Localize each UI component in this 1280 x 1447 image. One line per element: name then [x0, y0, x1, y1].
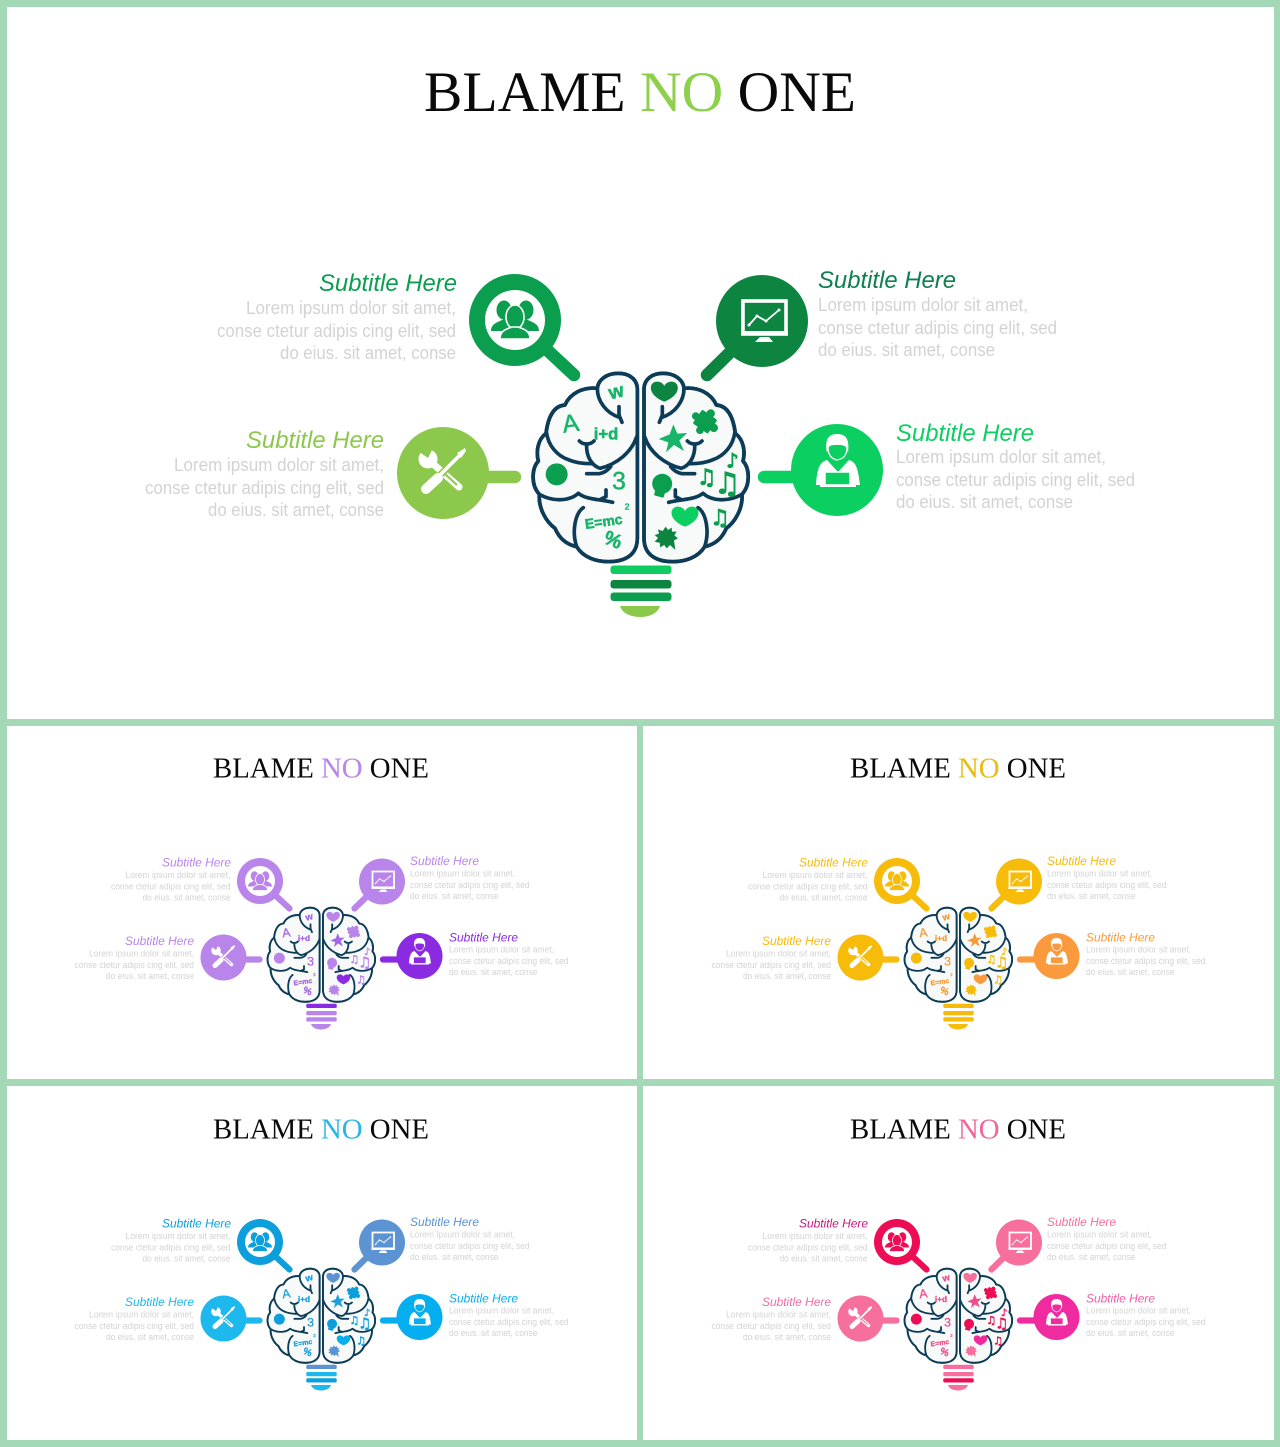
brain illustration: ♪	[364, 947, 370, 958]
brain illustration: %	[601, 527, 625, 554]
body text	[748, 1231, 868, 1264]
icon: wrench and screwdriver	[397, 427, 515, 519]
body text	[712, 948, 831, 981]
brain illustration: %	[938, 1346, 951, 1359]
brain illustration: ♫	[986, 1314, 996, 1327]
brain illustration: ♫	[349, 953, 359, 966]
body text: Lorem ipsum dolor sit amet,	[726, 948, 831, 958]
body text: Lorem ipsum dolor sit amet,	[126, 1231, 230, 1241]
light bulb base	[943, 1004, 974, 1030]
subtitle: Subtitle Here	[1047, 854, 1116, 868]
body text: do eius. sit amet, conse	[106, 1332, 194, 1342]
slide content	[712, 1114, 1206, 1390]
icon: wrench and screwdriver	[838, 934, 896, 980]
icon: monitor chart	[992, 1220, 1042, 1270]
subtitle: Subtitle Here	[162, 1216, 231, 1230]
brain illustration: ♪	[726, 449, 739, 473]
body text: do eius. sit amet, conse	[743, 1332, 831, 1342]
icon: monitor chart	[354, 858, 405, 908]
callout: team search	[111, 1216, 290, 1270]
brain illustration: w	[940, 911, 952, 924]
body text: conse ctetur adipis cing elit, sed	[1047, 1241, 1166, 1251]
body text	[449, 944, 568, 977]
body text	[896, 447, 1135, 512]
callout: monitor chart	[992, 854, 1166, 908]
brain illustration: ♫	[986, 953, 996, 966]
callout: monitor chart	[354, 854, 530, 908]
callout: tools	[712, 934, 896, 981]
subtitle: Subtitle Here	[246, 427, 384, 454]
body text: Lorem ipsum dolor sit amet,	[762, 1231, 868, 1241]
body text: conse ctetur adipis cing elit, sed	[145, 478, 384, 498]
subtitle: Subtitle Here	[410, 854, 479, 868]
callout: team search	[748, 1216, 926, 1270]
brain illustration: ♫	[697, 465, 717, 490]
brain illustration: 2	[950, 1333, 953, 1338]
title: BLAME NO ONE	[213, 752, 429, 784]
body text: Lorem ipsum dolor sit amet,	[726, 1310, 831, 1320]
callout: monitor chart	[354, 1215, 530, 1270]
body text: Lorem ipsum dolor sit amet,	[174, 455, 384, 475]
callout: person at laptop	[1020, 930, 1206, 979]
icon: person with laptop	[1020, 933, 1080, 979]
body text	[748, 870, 868, 902]
callout: tools	[712, 1295, 896, 1342]
body text: Lorem ipsum dolor sit amet,	[449, 1306, 554, 1316]
brain illustration: 3	[307, 1316, 314, 1330]
icon: person with laptop	[764, 424, 883, 516]
body text: Lorem ipsum dolor sit amet,	[1086, 1306, 1191, 1316]
brain illustration: i+d	[594, 425, 618, 444]
brain illustration: i+d	[935, 933, 947, 943]
body text: conse ctetur adipis cing elit, sed	[1086, 1317, 1206, 1327]
light bulb base	[306, 1004, 337, 1030]
brain illustration: ♫	[993, 1334, 1003, 1347]
brain illustration: ♪	[1001, 1308, 1007, 1319]
brain illustration: w	[303, 911, 315, 924]
icon: wrench and screwdriver	[200, 1296, 260, 1342]
callout: tools	[145, 427, 515, 520]
subtitle: Subtitle Here	[762, 934, 831, 948]
body text: conse ctetur adipis cing elit, sed	[748, 882, 868, 892]
icon: wrench and screwdriver	[838, 1296, 896, 1342]
subtitle: Subtitle Here	[896, 420, 1034, 447]
body text: Lorem ipsum dolor sit amet,	[89, 948, 194, 958]
brain illustration: %	[938, 985, 951, 998]
body text	[449, 1306, 568, 1338]
body text: do eius. sit amet, conse	[142, 1254, 230, 1264]
body text	[1047, 1230, 1166, 1262]
brain illustration: 3	[612, 468, 626, 495]
brain illustration: 2	[313, 972, 316, 977]
icon: monitor chart	[707, 275, 808, 375]
body text: conse ctetur adipis cing elit, sed	[712, 1321, 831, 1331]
body text: do eius. sit amet, conse	[1047, 1252, 1136, 1262]
icon: person with laptop	[383, 1294, 442, 1340]
callout: team search	[217, 270, 574, 375]
callout: monitor chart	[992, 1215, 1166, 1270]
subtitle: Subtitle Here	[319, 270, 457, 297]
body text: Lorem ipsum dolor sit amet,	[89, 1310, 194, 1320]
icon: person with laptop	[383, 933, 442, 979]
panel: pink slide	[643, 1086, 1274, 1440]
body text: Lorem ipsum dolor sit amet,	[1086, 944, 1191, 954]
body text: Lorem ipsum dolor sit amet,	[410, 1230, 515, 1240]
subtitle: Subtitle Here	[162, 856, 231, 870]
body text: conse ctetur adipis cing elit, sed	[1086, 956, 1206, 966]
body text: conse ctetur adipis cing elit, sed	[818, 318, 1057, 338]
brain illustration: w	[606, 380, 627, 405]
brain illustration: ♫	[356, 973, 366, 986]
icon: wrench and screwdriver	[200, 934, 260, 980]
body text: conse ctetur adipis cing elit, sed	[748, 1242, 868, 1252]
panel: large green slide	[7, 7, 1274, 719]
brain illustration: ♫	[358, 954, 371, 972]
body text: do eius. sit amet, conse	[449, 967, 538, 977]
body text: Lorem ipsum dolor sit amet,	[246, 298, 456, 318]
callout: person at laptop	[383, 1292, 568, 1340]
callout: person at laptop	[383, 930, 568, 979]
body text: do eius. sit amet, conse	[280, 343, 456, 363]
subtitle: Subtitle Here	[1047, 1215, 1116, 1229]
brain illustration: i+d	[298, 933, 310, 943]
brain illustration: A	[918, 925, 929, 940]
body text: conse ctetur adipis cing elit, sed	[74, 1321, 194, 1331]
brain illustration: i+d	[935, 1294, 947, 1304]
brain illustration: ♫	[993, 973, 1003, 986]
subtitle: Subtitle Here	[1086, 930, 1155, 944]
body text: do eius. sit amet, conse	[1047, 891, 1136, 901]
body text: Lorem ipsum dolor sit amet,	[449, 944, 554, 954]
subtitle: Subtitle Here	[799, 1216, 868, 1230]
body text: do eius. sit amet, conse	[208, 500, 384, 520]
body text	[410, 1230, 530, 1262]
body text	[410, 868, 530, 901]
body text: Lorem ipsum dolor sit amet,	[762, 870, 868, 880]
brain illustration	[533, 373, 748, 562]
subtitle: Subtitle Here	[410, 1215, 479, 1229]
body text: do eius. sit amet, conse	[780, 1254, 868, 1264]
brain illustration: ♫	[358, 1315, 371, 1333]
panel: blue slide	[7, 1086, 637, 1440]
body text: conse ctetur adipis cing elit, sed	[74, 960, 194, 970]
brain illustration	[268, 1269, 375, 1363]
body text: do eius. sit amet, conse	[410, 891, 498, 901]
callout: team search	[748, 856, 926, 908]
title: BLAME NO ONE	[850, 1114, 1066, 1146]
brain illustration: A	[561, 410, 581, 439]
body text: conse ctetur adipis cing elit, sed	[449, 956, 568, 966]
brain illustration: E=mc	[930, 1339, 950, 1348]
body text: do eius. sit amet, conse	[1086, 1328, 1174, 1338]
panel: purple slide	[7, 726, 637, 1079]
brain illustration: %	[301, 1346, 314, 1359]
body text: Lorem ipsum dolor sit amet,	[1047, 1230, 1152, 1240]
body text	[111, 870, 230, 902]
callout: person at laptop	[1020, 1292, 1206, 1340]
brain illustration: w	[303, 1272, 315, 1285]
body text: do eius. sit amet, conse	[743, 971, 831, 981]
title: BLAME NO ONE	[424, 61, 856, 124]
body text: conse ctetur adipis cing elit, sed	[217, 321, 456, 341]
icon: monitor chart	[354, 1220, 405, 1270]
body text: do eius. sit amet, conse	[896, 492, 1073, 512]
body text	[217, 298, 456, 363]
subtitle: Subtitle Here	[449, 930, 518, 944]
body text: do eius. sit amet, conse	[780, 892, 868, 902]
brain illustration: 3	[944, 955, 951, 969]
body text: Lorem ipsum dolor sit amet,	[126, 870, 230, 880]
body text: do eius. sit amet, conse	[142, 892, 230, 902]
brain illustration: ♫	[349, 1314, 359, 1327]
brain illustration: w	[940, 1272, 952, 1285]
body text: do eius. sit amet, conse	[410, 1252, 498, 1262]
brain illustration: E=mc	[930, 978, 950, 987]
light bulb base	[943, 1365, 974, 1390]
brain illustration: E=mc	[293, 978, 313, 987]
body text: conse ctetur adipis cing elit, sed	[111, 882, 230, 892]
icon: magnifier with people	[874, 858, 926, 908]
callout: team search	[111, 856, 290, 908]
brain illustration: ♫	[710, 506, 730, 531]
body text	[1086, 1306, 1206, 1338]
body text: conse ctetur adipis cing elit, sed	[1047, 880, 1166, 890]
icon: magnifier with people	[469, 274, 574, 375]
callout: person at laptop	[764, 420, 1135, 516]
body text: conse ctetur adipis cing elit, sed	[449, 1317, 568, 1327]
brain illustration: ♫	[995, 954, 1008, 972]
body text	[74, 1310, 194, 1342]
brain illustration	[905, 908, 1012, 1002]
brain illustration: E=mc	[584, 511, 624, 532]
callout: tools	[74, 934, 260, 981]
body text: do eius. sit amet, conse	[449, 1328, 538, 1338]
subtitle: Subtitle Here	[762, 1295, 831, 1309]
subtitle: Subtitle Here	[125, 1295, 194, 1309]
light bulb base	[306, 1365, 337, 1390]
brain illustration: ♫	[356, 1334, 366, 1347]
subtitle: Subtitle Here	[818, 267, 956, 294]
body text: do eius. sit amet, conse	[1086, 967, 1174, 977]
brain illustration: ♪	[1001, 947, 1007, 958]
body text: Lorem ipsum dolor sit amet,	[1047, 868, 1152, 878]
body text	[818, 295, 1057, 360]
body text: do eius. sit amet, conse	[106, 971, 194, 981]
brain illustration: %	[301, 985, 314, 998]
brain illustration: A	[281, 925, 292, 940]
body text	[1086, 944, 1206, 977]
subtitle: Subtitle Here	[1086, 1292, 1155, 1306]
callout: tools	[74, 1295, 260, 1342]
icon: magnifier with people	[237, 1219, 290, 1270]
body text	[145, 455, 384, 520]
brain illustration: ♫	[714, 466, 741, 501]
body text	[111, 1231, 230, 1264]
brain illustration: ♫	[995, 1315, 1008, 1333]
brain illustration: 2	[625, 502, 630, 512]
body text: conse ctetur adipis cing elit, sed	[410, 1241, 530, 1251]
icon: monitor chart	[992, 858, 1042, 908]
title: BLAME NO ONE	[213, 1114, 429, 1146]
brain illustration: A	[281, 1286, 292, 1301]
icon: person with laptop	[1020, 1294, 1080, 1340]
brain illustration: 3	[944, 1316, 951, 1330]
title: BLAME NO ONE	[850, 752, 1066, 784]
brain illustration: ♪	[364, 1308, 370, 1319]
brain illustration: 3	[307, 955, 314, 969]
slide content	[74, 752, 568, 1030]
body text: Lorem ipsum dolor sit amet,	[818, 295, 1028, 315]
panel: yellow slide	[643, 726, 1274, 1079]
subtitle: Subtitle Here	[449, 1292, 518, 1306]
body text: Lorem ipsum dolor sit amet,	[410, 868, 515, 878]
brain illustration	[268, 908, 375, 1002]
body text	[712, 1310, 831, 1342]
body text: do eius. sit amet, conse	[818, 340, 995, 360]
callout: monitor chart	[707, 267, 1057, 375]
body text: conse ctetur adipis cing elit, sed	[712, 960, 831, 970]
subtitle: Subtitle Here	[125, 934, 194, 948]
body text	[74, 948, 194, 981]
slide content	[74, 1114, 568, 1390]
body text: conse ctetur adipis cing elit, sed	[111, 1242, 230, 1252]
slide content	[712, 752, 1206, 1030]
brain illustration: 2	[950, 972, 953, 977]
subtitle: Subtitle Here	[799, 856, 868, 870]
icon: magnifier with people	[237, 858, 290, 908]
icon: magnifier with people	[874, 1219, 926, 1270]
light bulb base	[610, 566, 672, 617]
body text	[1047, 868, 1166, 901]
body text: conse ctetur adipis cing elit, sed	[896, 470, 1135, 490]
brain illustration: A	[918, 1286, 929, 1301]
brain illustration: E=mc	[293, 1339, 313, 1348]
body text: conse ctetur adipis cing elit, sed	[410, 880, 530, 890]
brain illustration	[905, 1269, 1012, 1363]
brain illustration: i+d	[298, 1294, 310, 1304]
brain illustration: 2	[313, 1333, 316, 1338]
body text: Lorem ipsum dolor sit amet,	[896, 447, 1106, 467]
